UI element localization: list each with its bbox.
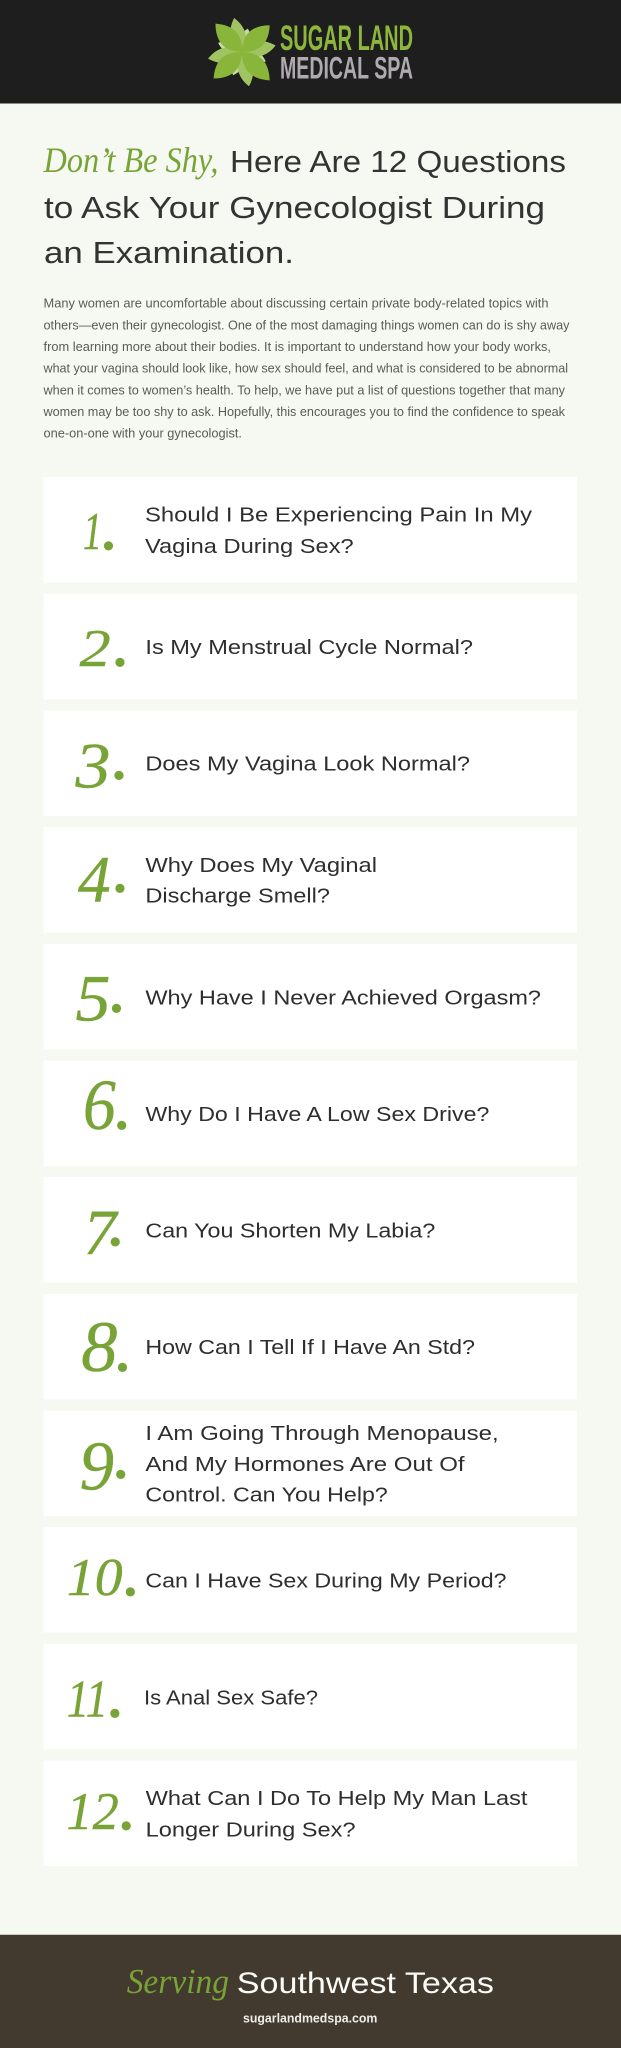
card: question 8 [44,1294,577,1400]
footer heading: Serving [127,1962,229,2001]
logo wordmark [280,19,413,85]
icon: green leaf star [207,16,277,88]
question text: What Can I Do To Help My Man Last [146,1787,528,1810]
number 6: 6 [83,1065,116,1145]
number 1: 1 [83,503,102,561]
question text: Control. Can You Help? [145,1484,388,1507]
title [43,140,566,270]
question text [145,504,533,558]
question text: Can I Have Sex During My Period? [145,1569,507,1592]
intro paragraph: others—even their gynecologist. One of the most damaging things women can do is shy away [44,318,570,332]
question text: How Can I Tell If I Have An Std? [145,1336,475,1359]
number 8 [81,1301,134,1388]
card: question 12 [44,1760,577,1866]
number 9 [80,1408,132,1505]
footer website: sugarlandmedspa.com [243,2010,377,2025]
title: an Examination. [44,235,294,270]
card: question 11 [44,1644,577,1750]
intro paragraph: Many women are uncomfortable about discussing certain private body-related topics with [44,297,548,311]
number 2: . [112,596,132,683]
intro paragraph: women may be too shy to ask. Hopefully, this encourages you to find the confidence to speak [43,405,566,419]
intro paragraph: what your vagina should look like, how sex should feel, and what is considered to be abnormal [43,362,568,376]
number 8: . [115,1301,134,1388]
number 7: 7 [84,1197,119,1269]
question text: Should I Be Experiencing Pain In My [145,504,533,527]
number 9: 9 [80,1428,114,1505]
question text [146,1787,528,1842]
number 8: 8 [81,1307,118,1387]
number 11 [67,1647,126,1734]
number 12: 12 [66,1783,119,1841]
question text: Why Do I Have A Low Sex Drive? [145,1103,489,1126]
number 3: 3 [74,730,110,802]
number 3 [74,709,131,802]
title: Here Are 12 Questions [230,144,566,179]
number 6: . [114,1059,133,1146]
title: Don’t Be Shy, [43,140,219,180]
footer band [0,1934,621,2048]
card: question 4 [44,822,577,932]
number 11: . [107,1647,126,1734]
number 9: . [113,1408,132,1495]
question text: Does My Vagina Look Normal? [145,753,470,776]
number 5 [76,942,128,1036]
number 10: 10 [67,1549,123,1607]
intro paragraph: when it comes to women’s health. To help, we have put a list of questions together that many [42,383,566,397]
number 4 [78,822,132,917]
footer heading: Southwest Texas [237,1967,494,2000]
number 7: . [107,1176,127,1262]
question text: And My Hormones Are Out Of [145,1453,465,1476]
question text [145,854,377,908]
question text: Can You Shorten My Labia? [145,1219,435,1242]
footer heading [127,1962,494,2001]
number 10: . [122,1526,142,1612]
question text [145,1422,499,1507]
title: to Ask Your Gynecologist During [44,190,545,225]
intro paragraph: from learning more about their bodies. It is important to understand how your body works, [44,340,551,354]
logo [207,16,413,88]
question text: Is My Menstrual Cycle Normal? [145,636,473,659]
intro paragraph: one-on-one with your gynecologist. [44,427,242,441]
number 6 [83,1059,133,1146]
number 2: 2 [80,620,111,678]
number 12: . [118,1760,138,1846]
question text: Vagina During Sex? [145,535,354,558]
number 10 [67,1526,142,1612]
card: question 5 [44,942,577,1050]
number 4: 4 [78,844,111,917]
question text: Why Have I Never Achieved Orgasm? [145,986,541,1009]
card: question 1 [44,477,577,582]
card: question 7 [44,1176,577,1282]
card: question 10 [44,1526,577,1632]
number 11: 11 [67,1671,108,1729]
number 5: . [109,942,128,1029]
number 7 [84,1176,127,1269]
logo wordmark: SUGAR LAND [280,19,413,58]
card: question 2 [44,594,577,700]
number 4: . [112,822,132,909]
question text: Is Anal Sex Safe? [144,1686,318,1709]
intro paragraph [42,297,570,441]
card: question 6 [44,1059,577,1166]
number 5: 5 [76,963,110,1036]
number 3: . [111,709,131,796]
header band [0,0,621,104]
number 12 [66,1760,138,1846]
card: question 3 [44,709,577,816]
number 1: . [101,480,120,566]
question text: I Am Going Through Menopause, [145,1422,499,1445]
logo wordmark: MEDICAL SPA [280,49,413,85]
question text: Longer During Sex? [146,1819,356,1842]
number 2 [80,596,132,683]
card: question 9 [44,1408,577,1516]
question text: Why Does My Vaginal [145,854,377,877]
number 1 [83,480,120,566]
question text: Discharge Smell? [145,885,330,908]
